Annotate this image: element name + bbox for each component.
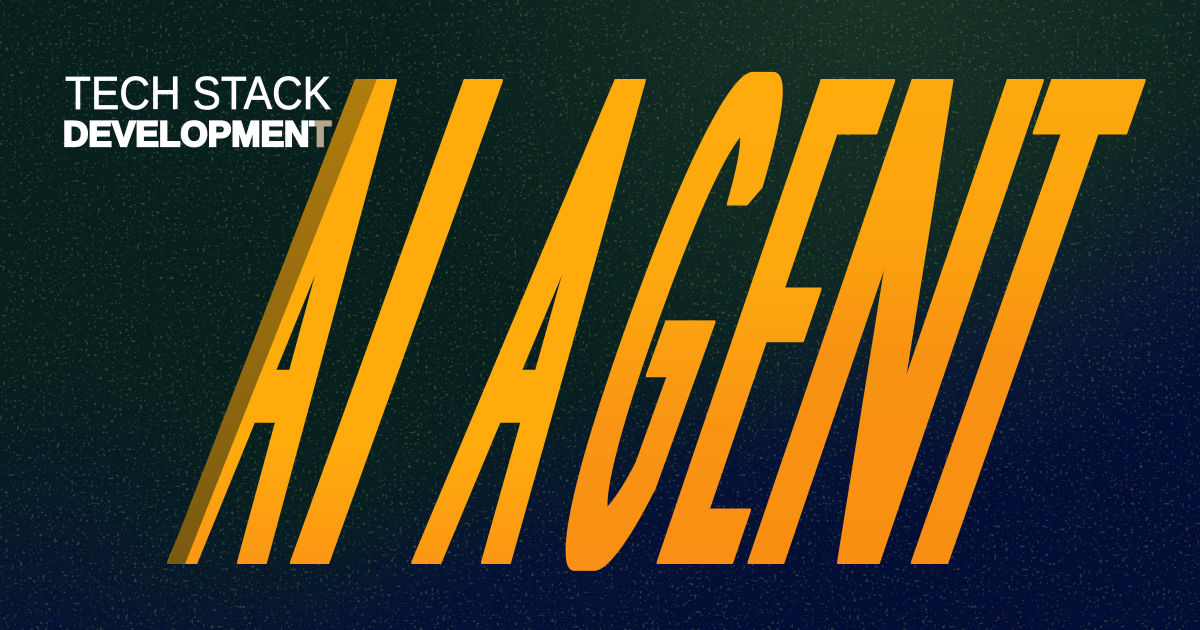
heading: tech stack development <box>63 67 331 154</box>
heading line: tech stack: TECH STACK <box>65 67 331 119</box>
letter A drop shadow <box>167 79 377 564</box>
heading line: development: DEVELOPMENT <box>63 115 331 154</box>
